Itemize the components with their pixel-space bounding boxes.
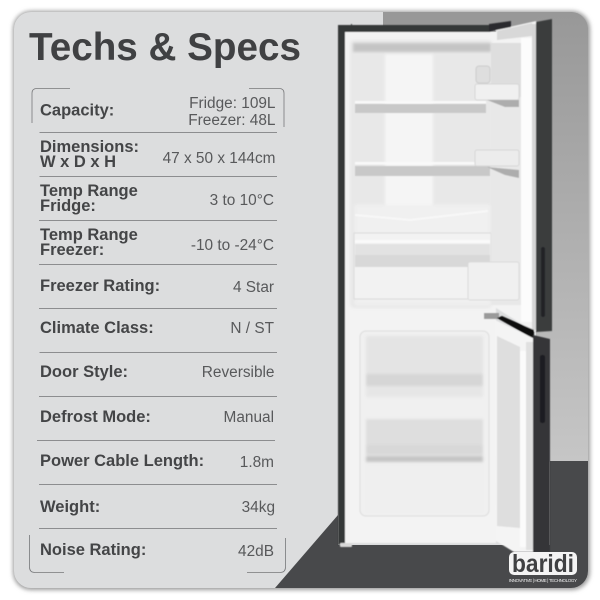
row: door style [40, 363, 274, 381]
cabinet side and top [338, 24, 490, 545]
foot [340, 543, 352, 547]
upper door outer panel [536, 19, 552, 332]
row: defrost mode [40, 408, 274, 426]
row: freezer rating: Freezer Rating: [40, 277, 160, 295]
row: temp range fridge [40, 182, 274, 215]
row: defrost mode: Manual [224, 409, 274, 426]
row: temp range fridge: Temp Range [40, 182, 138, 200]
row: capacity: Freezer: 48L [188, 112, 276, 129]
fridge cavity [350, 40, 492, 308]
row: noise rating [40, 541, 274, 560]
row: temp range freezer: Temp Range [40, 226, 138, 244]
upper door [468, 21, 536, 331]
row: temp range freezer: Freezer: [40, 241, 104, 259]
row: defrost mode: Defrost Mode: [40, 408, 151, 426]
row: power cable length [40, 452, 274, 471]
shelf: upper [355, 101, 486, 113]
illustration: open fridge freezer [338, 19, 552, 552]
cabinet front [345, 32, 496, 543]
top hinge [489, 21, 511, 32]
lower door [495, 320, 533, 552]
door shelves [475, 84, 519, 100]
row: dimensions: 47 x 50 x 144cm [163, 150, 276, 167]
middle hinge [484, 313, 499, 319]
row: weight [40, 498, 275, 516]
row: power cable length: 1.8m [240, 454, 274, 471]
row: power cable length: Power Cable Length: [40, 452, 204, 470]
row: capacity: Fridge: 109L [189, 95, 276, 112]
row: weight: Weight: [40, 498, 100, 516]
freezer cavity [360, 331, 489, 516]
row: dimensions: W x D x H [40, 153, 116, 171]
logo: baridi: baridi [512, 550, 574, 578]
row: temp range freezer [40, 226, 274, 259]
row: capacity: Capacity: [40, 102, 114, 120]
row: freezer rating [40, 277, 274, 296]
row: climate class: N / ST [230, 320, 275, 337]
freezer divider band [497, 316, 534, 339]
title: Techs & Specs [29, 26, 301, 69]
bracket: bottom [30, 535, 286, 572]
bracket: top [32, 88, 284, 127]
row: freezer rating: 4 Star [233, 279, 274, 296]
row: noise rating: Noise Rating: [40, 541, 146, 559]
row: climate class [40, 319, 275, 337]
row: weight: 34kg [242, 499, 275, 516]
row: door style: Reversible [202, 364, 274, 381]
row: temp range freezer: -10 to -24°C [191, 237, 274, 254]
row: noise rating: 42dB [238, 543, 274, 560]
salad drawer [354, 211, 491, 299]
row: temp range fridge: Fridge: [40, 197, 96, 215]
panel: specification table [30, 88, 286, 572]
row: door style: Door Style: [40, 363, 128, 381]
logo tagline: INNOVATIVE | HOME | TECHNOLOGY [509, 578, 577, 583]
row: capacity [40, 95, 276, 129]
row: climate class: Climate Class: [40, 319, 154, 337]
lower door outer panel [533, 335, 550, 552]
row: dimensions: Dimensions: [40, 138, 139, 156]
shelf: middle [355, 162, 490, 176]
row: temp range fridge: 3 to 10°C [210, 192, 274, 209]
row: dimensions [40, 138, 276, 171]
